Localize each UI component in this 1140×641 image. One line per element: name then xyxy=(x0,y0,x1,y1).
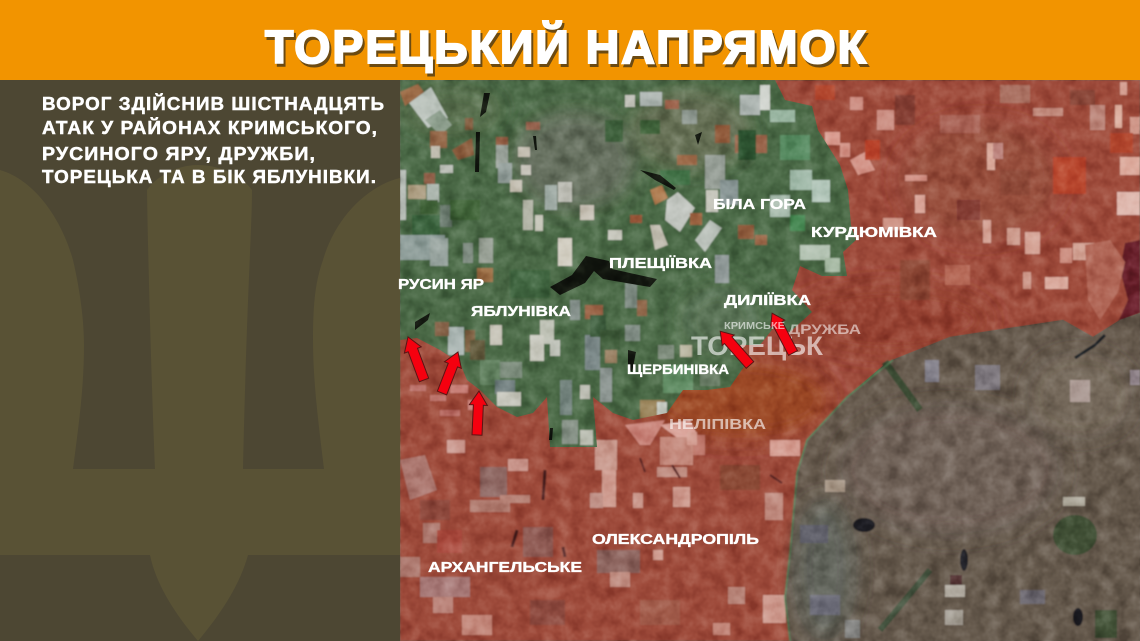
map: occupied red area xyxy=(400,80,1140,641)
map: government-held green area xyxy=(400,80,880,460)
light & brown fields xyxy=(409,87,448,128)
map: gray city area xyxy=(785,313,1140,641)
arrow 2 xyxy=(434,349,466,396)
label: Курдюмівка: КУРДЮМІВКА xyxy=(811,225,938,241)
label: Торецьк: ТОРЕЦЬК xyxy=(691,331,824,361)
label: Неліпівка: НЕЛІПІВКА xyxy=(669,417,767,433)
label: Щербинівка: ЩЕРБИНІВКА xyxy=(627,361,729,377)
arrow 5 xyxy=(765,309,800,357)
summary text block xyxy=(42,93,385,187)
water xyxy=(1118,240,1140,322)
tinted fields near frontline xyxy=(770,110,795,122)
map xyxy=(400,80,1140,641)
label: Русин Яр: РУСИН ЯР xyxy=(398,277,484,293)
icon: trident watermark xyxy=(0,165,400,641)
label: Архангельське: АРХАНГЕЛЬСЬКЕ xyxy=(428,560,582,576)
title: ТОРЕЦЬКИЙ НАПРЯМОК xyxy=(265,21,868,73)
fields near front xyxy=(450,385,468,393)
fields, lower left xyxy=(447,440,465,453)
left panel xyxy=(0,80,400,641)
label: Кримське: КРИМСЬКЕ xyxy=(724,321,785,332)
label: Біла Гора: БІЛА ГОРА xyxy=(713,197,807,213)
arrow 3 xyxy=(468,391,488,435)
summary text block: ТОРЕЦЬКА ТА В БІК ЯБЛУНІВКИ. xyxy=(42,167,377,187)
summary text block: ВОРОГ ЗДІЙСНИВ ШІСТНАДЦЯТЬ xyxy=(42,93,385,114)
title: ТОРЕЦЬКИЙ НАПРЯМОК xyxy=(267,24,870,76)
label: Олександропіль: ОЛЕКСАНДРОПІЛЬ xyxy=(592,532,759,548)
map: water and ravines xyxy=(415,93,702,440)
label: Диліївка: ДИЛІЇВКА xyxy=(724,292,812,309)
header band xyxy=(0,0,1140,80)
label: Плещіївка: ПЛЕЩІЇВКА xyxy=(609,255,713,272)
arrow 4 xyxy=(714,326,756,370)
label: Дружба: ДРУЖБА xyxy=(788,321,861,337)
lake xyxy=(550,256,657,295)
summary text block: РУСИНОГО ЯРУ, ДРУЖБИ, xyxy=(42,144,316,164)
label: Яблунівка: ЯБЛУНІВКА xyxy=(471,304,572,320)
satellite texture xyxy=(400,80,1140,641)
arrow 1 xyxy=(400,334,432,383)
fields, upper right xyxy=(825,132,840,145)
summary text block: АТАК У РАЙОНАХ КРИМСЬКОГО, xyxy=(42,117,378,138)
